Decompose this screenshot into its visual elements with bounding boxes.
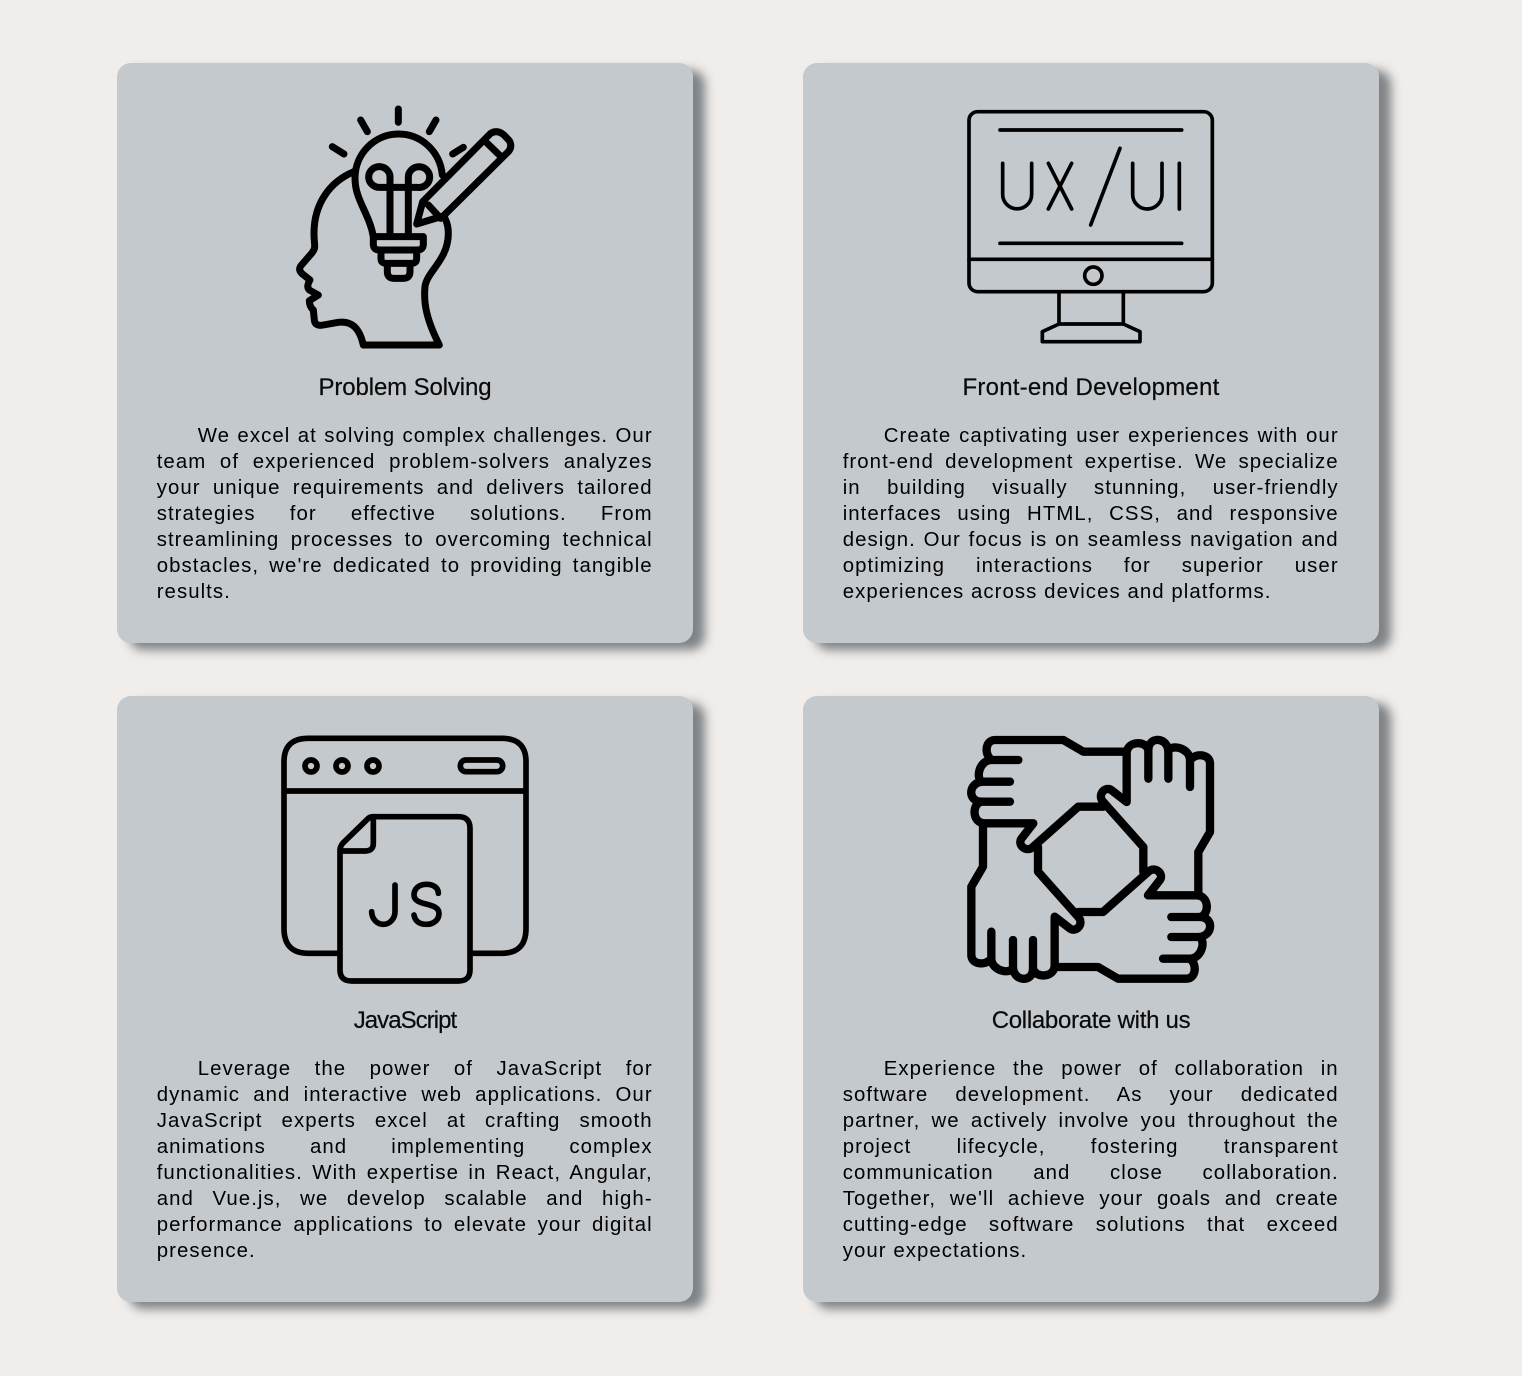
panel: collaborate with us (803, 696, 1379, 1302)
text block: collaboration description: your expectations. (843, 1240, 1027, 1262)
text block: collaboration description: communication and close collaboration. (843, 1162, 1339, 1184)
text block: front-end development description: Create captivating user experiences with our (884, 425, 1339, 447)
heading: collaborate with us: Collaborate with us (992, 1007, 1190, 1034)
icon: browser window with JS file (281, 736, 529, 984)
text block: collaboration description: Together, we'll achieve your goals and create (843, 1188, 1339, 1210)
panel: front-end development (803, 63, 1379, 643)
icon: monitor with UX/UI (967, 110, 1214, 344)
text block: front-end development description: optimizing interactions for superior user (843, 555, 1339, 577)
text block: front-end development description (843, 425, 1339, 603)
text block: problem solving description: obstacles, we're dedicated to providing tangible (157, 555, 653, 577)
text block: problem solving description: your unique requirements and delivers tailored (157, 477, 653, 499)
heading: javascript: JavaScript (354, 1007, 456, 1034)
panel: javascript (117, 696, 693, 1302)
text block: javascript description: animations and implementing complex (157, 1136, 653, 1158)
text block: problem solving description (156, 425, 653, 603)
panel: problem solving (117, 63, 693, 643)
text block: javascript description: and Vue.js, we develop scalable and high- (157, 1188, 653, 1210)
text block: collaboration description: project lifecycle, fostering transparent (843, 1136, 1339, 1158)
text block: problem solving description: results. (157, 581, 231, 603)
text block: front-end development description: in building visually stunning, user-friendly (843, 477, 1339, 499)
text block: collaboration description: Experience the power of collaboration in (884, 1058, 1339, 1080)
text block: front-end development description: front-end development expertise. We specialize (843, 451, 1339, 473)
heading: problem solving: Problem Solving (319, 374, 491, 401)
text block: javascript description: presence. (157, 1240, 256, 1262)
text block: problem solving description: streamlining processes to overcoming technical (157, 529, 653, 551)
text block: collaboration description: software development. As your dedicated (843, 1084, 1339, 1106)
text block: javascript description: JavaScript experts excel at crafting smooth (157, 1110, 653, 1132)
icon: head with light bulb and pencil (296, 106, 514, 348)
text block: problem solving description: team of experienced problem-solvers analyzes (157, 451, 653, 473)
text block: javascript description: dynamic and interactive web applications. Our (157, 1084, 653, 1106)
heading: front-end development: Front-end Development (963, 374, 1219, 401)
text block: front-end development description: experiences across devices and platforms. (843, 581, 1272, 603)
text block: javascript description: performance applications to elevate your digital (157, 1214, 653, 1236)
text block: collaboration description (842, 1058, 1339, 1262)
text block: front-end development description: design. Our focus is on seamless navigation and (843, 529, 1339, 551)
text block: problem solving description: strategies for effective solutions. From (157, 503, 653, 525)
icon: four interlocking hands (967, 736, 1214, 983)
text block: javascript description: functionalities. With expertise in React, Angular, (157, 1162, 653, 1184)
text block: javascript description (157, 1058, 653, 1262)
text block: problem solving description: We excel at solving complex challenges. Our (198, 425, 653, 447)
text block: javascript description: Leverage the power of JavaScript for (198, 1058, 653, 1080)
text block: collaboration description: partner, we actively involve you throughout the (843, 1110, 1339, 1132)
text block: collaboration description: cutting-edge software solutions that exceed (843, 1214, 1339, 1236)
text block: front-end development description: interfaces using HTML, CSS, and responsive (843, 503, 1339, 525)
